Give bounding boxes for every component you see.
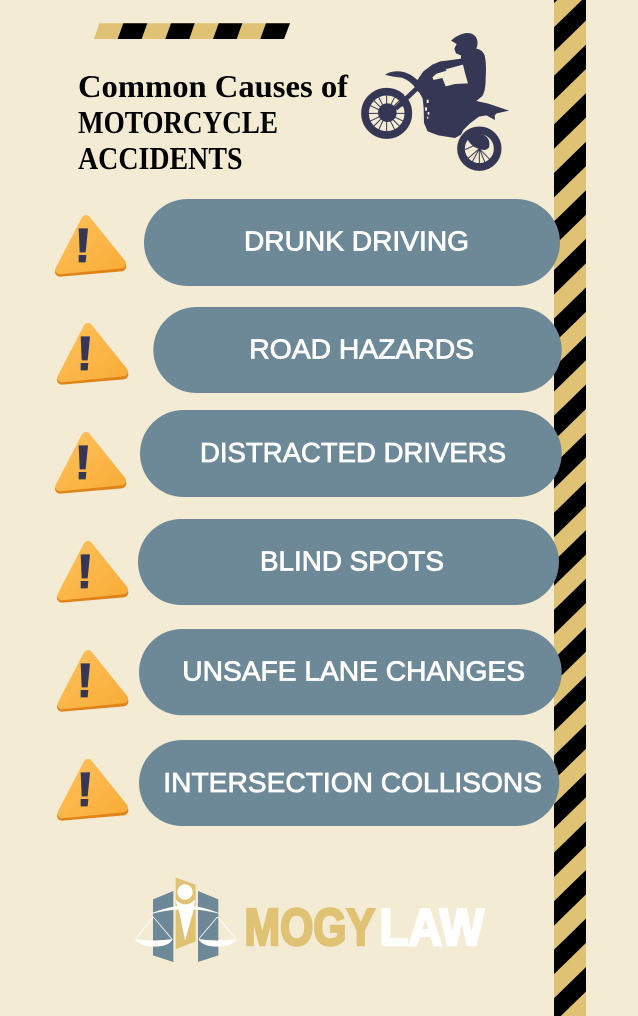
logo: scales emblem bbox=[135, 878, 237, 962]
logo: wordmark: LAW bbox=[380, 899, 485, 957]
logo: wordmark bbox=[244, 899, 485, 957]
pill: drunk driving: DRUNK DRIVING bbox=[244, 226, 469, 256]
logo: wordmark: MOGY bbox=[244, 899, 375, 957]
pill: blind spots bbox=[138, 519, 559, 605]
pill: road hazards: ROAD HAZARDS bbox=[249, 334, 474, 364]
icon: motorcycle rider bbox=[365, 33, 509, 167]
pill: blind spots: BLIND SPOTS bbox=[260, 546, 444, 576]
pill: distracted drivers bbox=[140, 410, 562, 497]
icon: warning 6 bbox=[62, 764, 123, 816]
pill: intersection collisons: INTERSECTION COLLISONS bbox=[163, 767, 542, 798]
pill: intersection collisons bbox=[139, 740, 559, 826]
pill: distracted drivers: DISTRACTED DRIVERS bbox=[200, 437, 506, 468]
title: Common Causes of bbox=[78, 68, 348, 104]
title bbox=[78, 68, 348, 176]
icon: warning 4 bbox=[62, 546, 123, 598]
hazard stripe column bbox=[554, 0, 586, 1016]
icon: warning 1 bbox=[60, 220, 121, 272]
title: ACCIDENTS bbox=[78, 140, 242, 176]
pill: drunk driving bbox=[144, 199, 560, 286]
title: MOTORCYCLE bbox=[78, 104, 278, 140]
top hazard bar bbox=[94, 23, 290, 39]
pill: unsafe lane changes bbox=[139, 629, 562, 715]
icon: warning 3 bbox=[60, 437, 121, 489]
icon: warning 2 bbox=[62, 328, 123, 380]
icon: warning 5 bbox=[62, 655, 123, 707]
pill: unsafe lane changes: UNSAFE LANE CHANGES bbox=[182, 656, 525, 686]
pill: road hazards bbox=[153, 307, 562, 393]
